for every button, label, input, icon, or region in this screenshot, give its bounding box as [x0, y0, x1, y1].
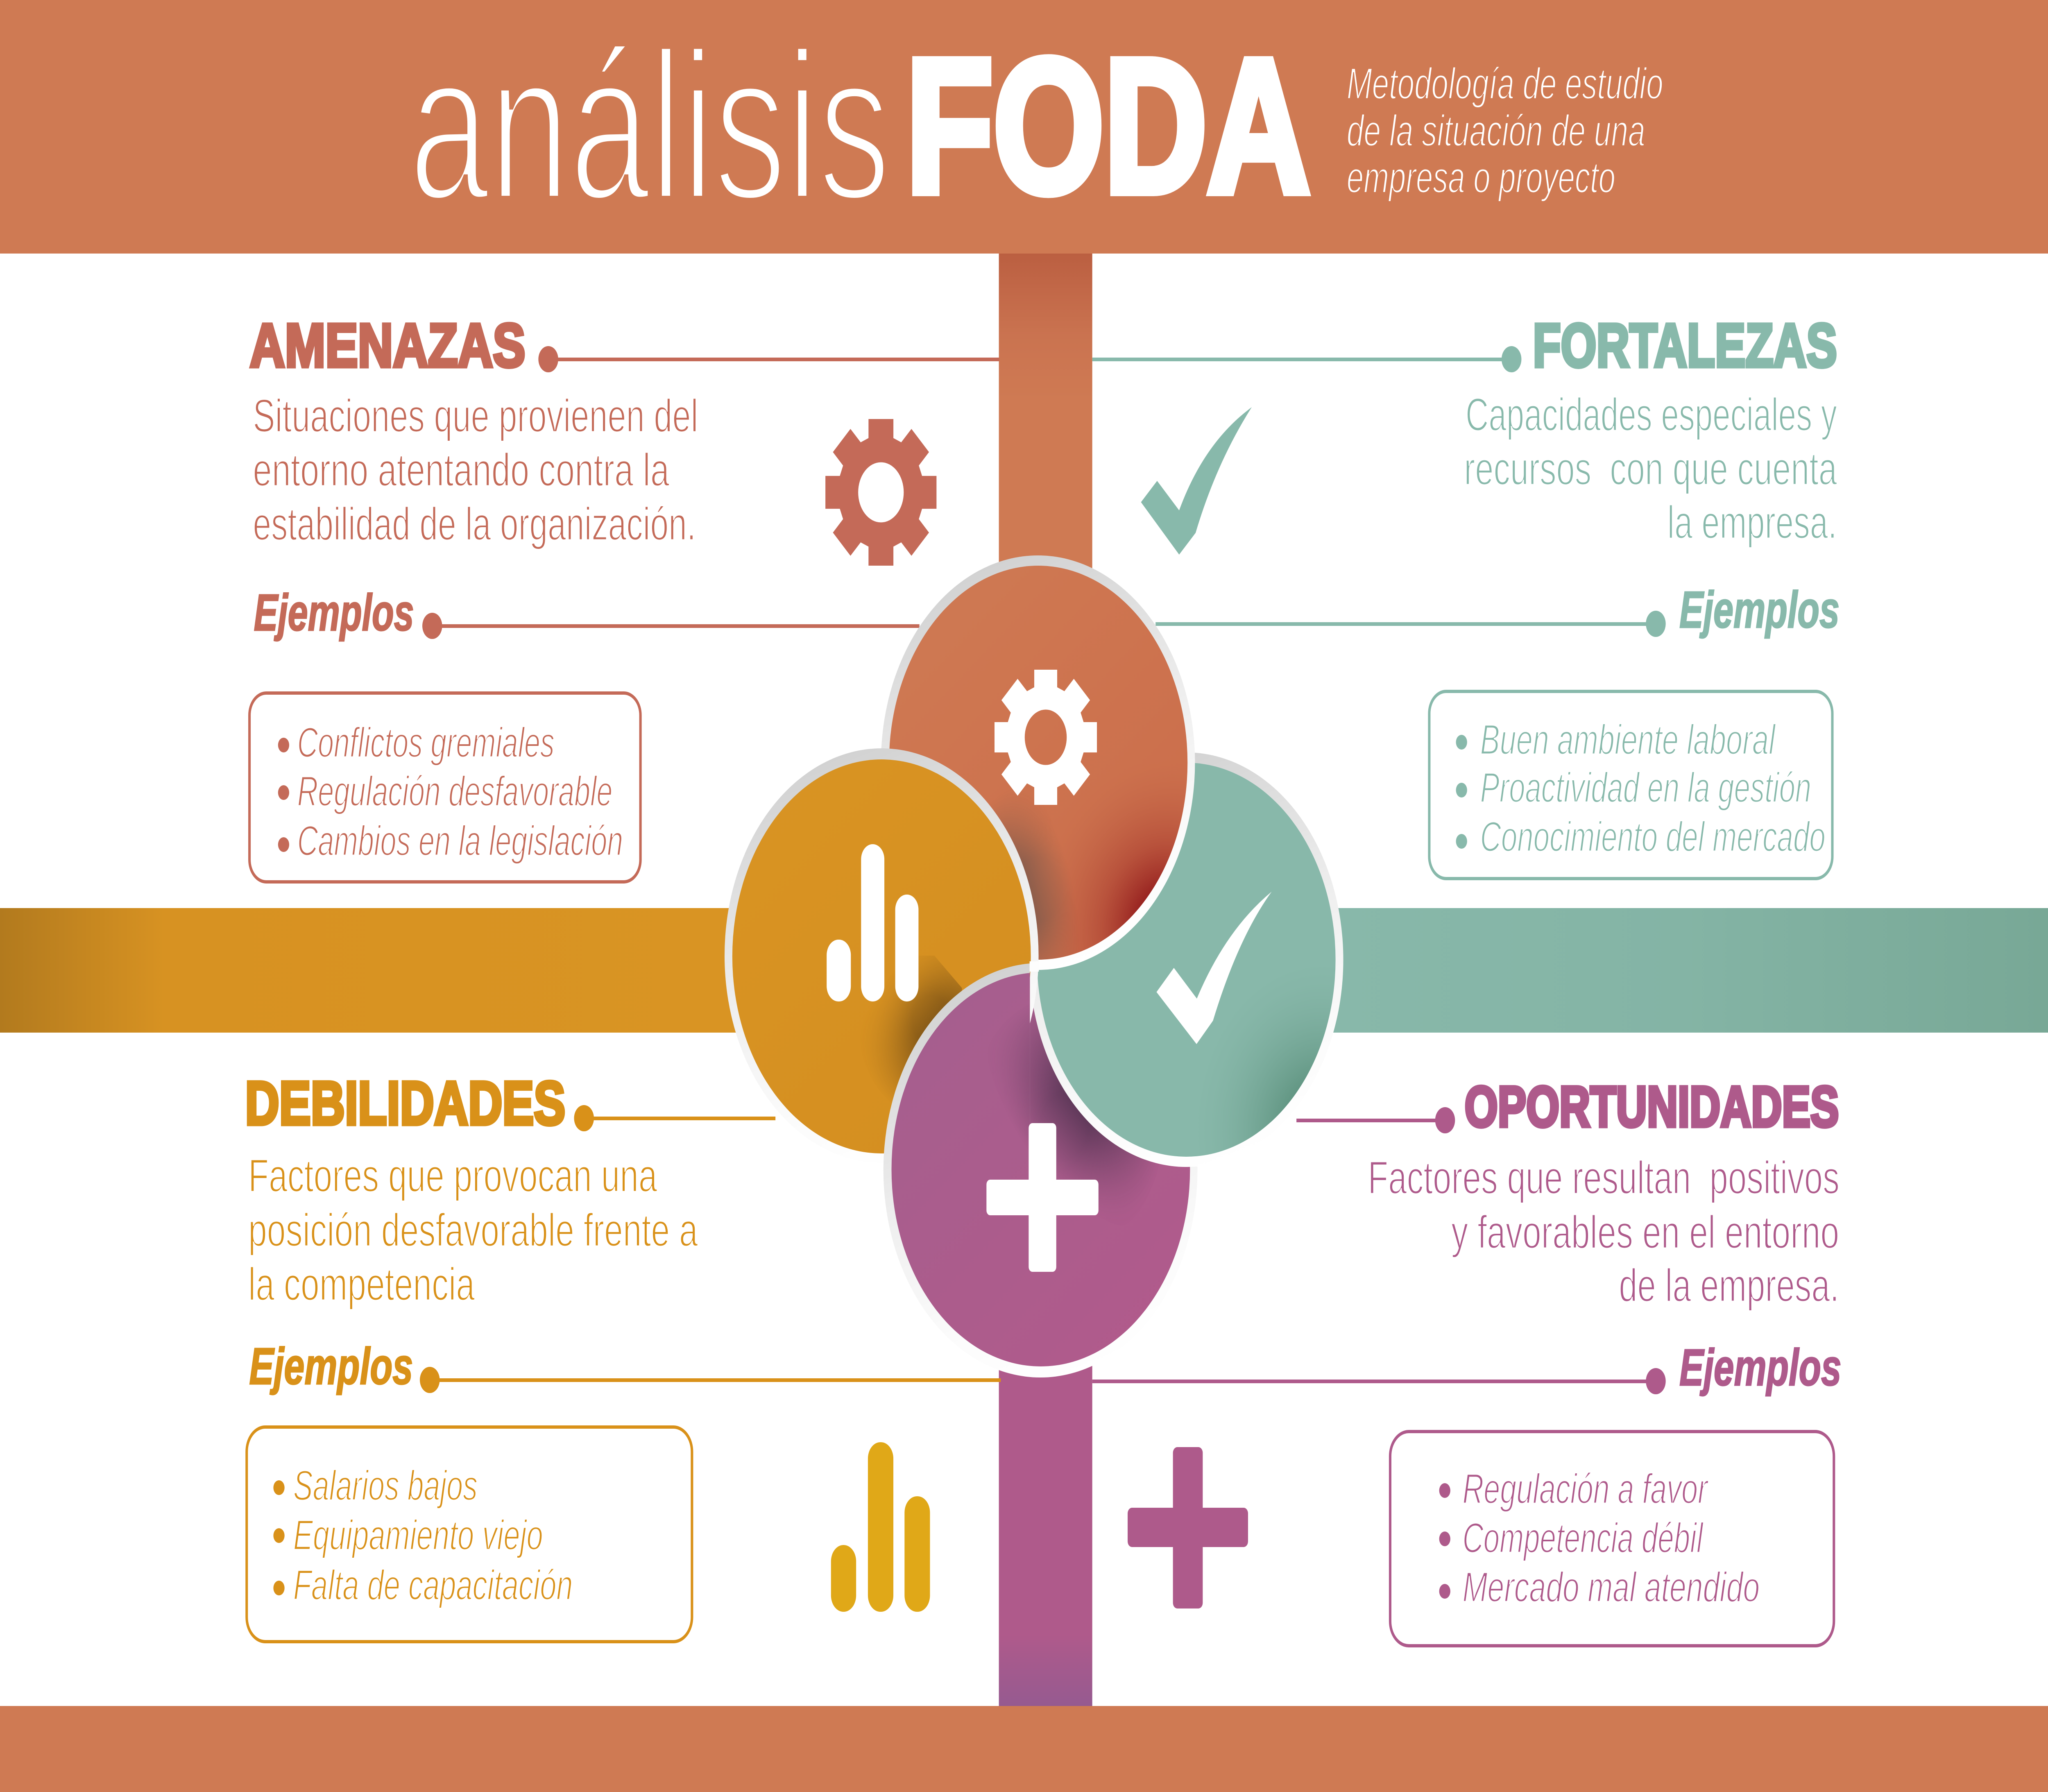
heading: oportunidades: OPORTUNIDADES [1465, 1075, 1839, 1139]
description: debilidades: posición desfavorable frente a [248, 1205, 698, 1256]
examples box: fortalezas: Proactividad en la gestión [1480, 764, 1811, 811]
circle: purple oportunidades base [884, 1008, 1198, 1377]
circle: purple overlap on yellow [884, 963, 1030, 1188]
title word: análisis: análisis [409, 8, 890, 244]
icon: white gear [995, 670, 1097, 805]
connector: oportunidades heading [1296, 1107, 1455, 1133]
icon: check mark [1141, 407, 1252, 555]
icon: white plus [986, 1123, 1099, 1272]
icon: plus [1128, 1447, 1248, 1608]
circle: teal fortalezas [1033, 753, 1343, 1167]
vertical band: top orange [999, 254, 1092, 581]
icon: white bars [827, 844, 918, 1001]
examples box: amenazas [249, 693, 641, 882]
subtitle [1347, 59, 1663, 202]
examples box: amenazas: Cambios en la legislación [297, 818, 623, 865]
circle: yellow debilidades [724, 748, 1039, 1153]
panel: fortalezas [1092, 312, 1840, 879]
examples box: debilidades: Falta de capacitación [293, 1562, 573, 1609]
label: ejemplos oportunidades: Ejemplos [1679, 1339, 1841, 1396]
description: amenazas: entorno atentando contra la [253, 444, 669, 496]
label: ejemplos fortalezas: Ejemplos [1679, 581, 1840, 639]
connector: oportunidades ejemplos [1092, 1368, 1666, 1394]
connector: debilidades heading [574, 1105, 775, 1131]
examples box: debilidades [247, 1427, 692, 1642]
description: debilidades: la competencia [248, 1259, 475, 1310]
connector: amenazas ejemplos [422, 613, 920, 639]
examples box: oportunidades: Regulación a favor [1462, 1466, 1709, 1513]
description: amenazas: estabilidad de la organización. [253, 498, 696, 550]
icon: white check [1156, 892, 1272, 1044]
heading: debilidades: DEBILIDADES [245, 1069, 565, 1138]
connector: debilidades ejemplos [420, 1367, 1001, 1393]
connector: fortalezas heading [1092, 346, 1521, 372]
subtitle: de la situación de una [1347, 106, 1645, 156]
title [409, 8, 1310, 244]
heading: fortalezas: FORTALEZAS [1533, 312, 1837, 380]
panel: oportunidades [1092, 1075, 1841, 1646]
circle: orange amenazas [881, 555, 1195, 970]
subtitle: Metodología de estudio [1347, 59, 1663, 109]
description: oportunidades [1368, 1152, 1840, 1312]
connector: amenazas heading [538, 346, 999, 372]
examples box: fortalezas [1429, 691, 1832, 879]
header band [0, 0, 2048, 254]
footer band [0, 1706, 2048, 1792]
label: ejemplos amenazas: Ejemplos [254, 584, 414, 641]
label: ejemplos debilidades: Ejemplos [249, 1337, 413, 1395]
description: fortalezas [1464, 389, 1837, 548]
centre crossing highlight [1030, 961, 1039, 972]
examples box: debilidades: Equipamiento viejo [293, 1512, 543, 1559]
vertical band: bottom purple [999, 1352, 1092, 1706]
description: fortalezas: Capacidades especiales y [1466, 389, 1837, 441]
examples box: amenazas: Regulación desfavorable [297, 768, 612, 815]
connector: fortalezas ejemplos [1155, 611, 1666, 637]
description: oportunidades: Factores que resultan positivos [1368, 1152, 1840, 1204]
description: debilidades: Factores que provocan una [248, 1150, 657, 1202]
panel: amenazas [249, 312, 999, 882]
icon: bars yellow [831, 1442, 930, 1612]
examples box: oportunidades: Competencia débil [1462, 1515, 1704, 1562]
description: amenazas [253, 390, 698, 550]
examples box: amenazas: Conflictos gremiales [297, 719, 555, 766]
description: fortalezas: recursos con que cuenta [1464, 443, 1837, 495]
description: amenazas: Situaciones que provienen del [253, 390, 698, 442]
heading: amenazas: AMENAZAS [250, 312, 526, 380]
subtitle: empresa o proyecto [1347, 153, 1615, 202]
icon: gear [825, 419, 936, 566]
examples box: oportunidades: Mercado mal atendido [1462, 1564, 1760, 1611]
panel: debilidades [245, 1069, 1001, 1642]
description: debilidades [248, 1150, 698, 1310]
description: oportunidades: de la empresa. [1619, 1260, 1839, 1312]
examples box: fortalezas: Buen ambiente laboral [1480, 716, 1776, 763]
description: fortalezas: la empresa. [1667, 497, 1837, 548]
horizontal band: left yellow [0, 908, 745, 1033]
examples box: debilidades: Salarios bajos [293, 1462, 478, 1509]
examples box: oportunidades [1390, 1432, 1834, 1646]
examples box: fortalezas: Conocimiento del mercado [1480, 813, 1826, 861]
title word: FODA: FODA [906, 20, 1310, 232]
horizontal band: right teal [1319, 908, 2048, 1033]
description: oportunidades: y favorables en el entorno [1451, 1207, 1839, 1258]
